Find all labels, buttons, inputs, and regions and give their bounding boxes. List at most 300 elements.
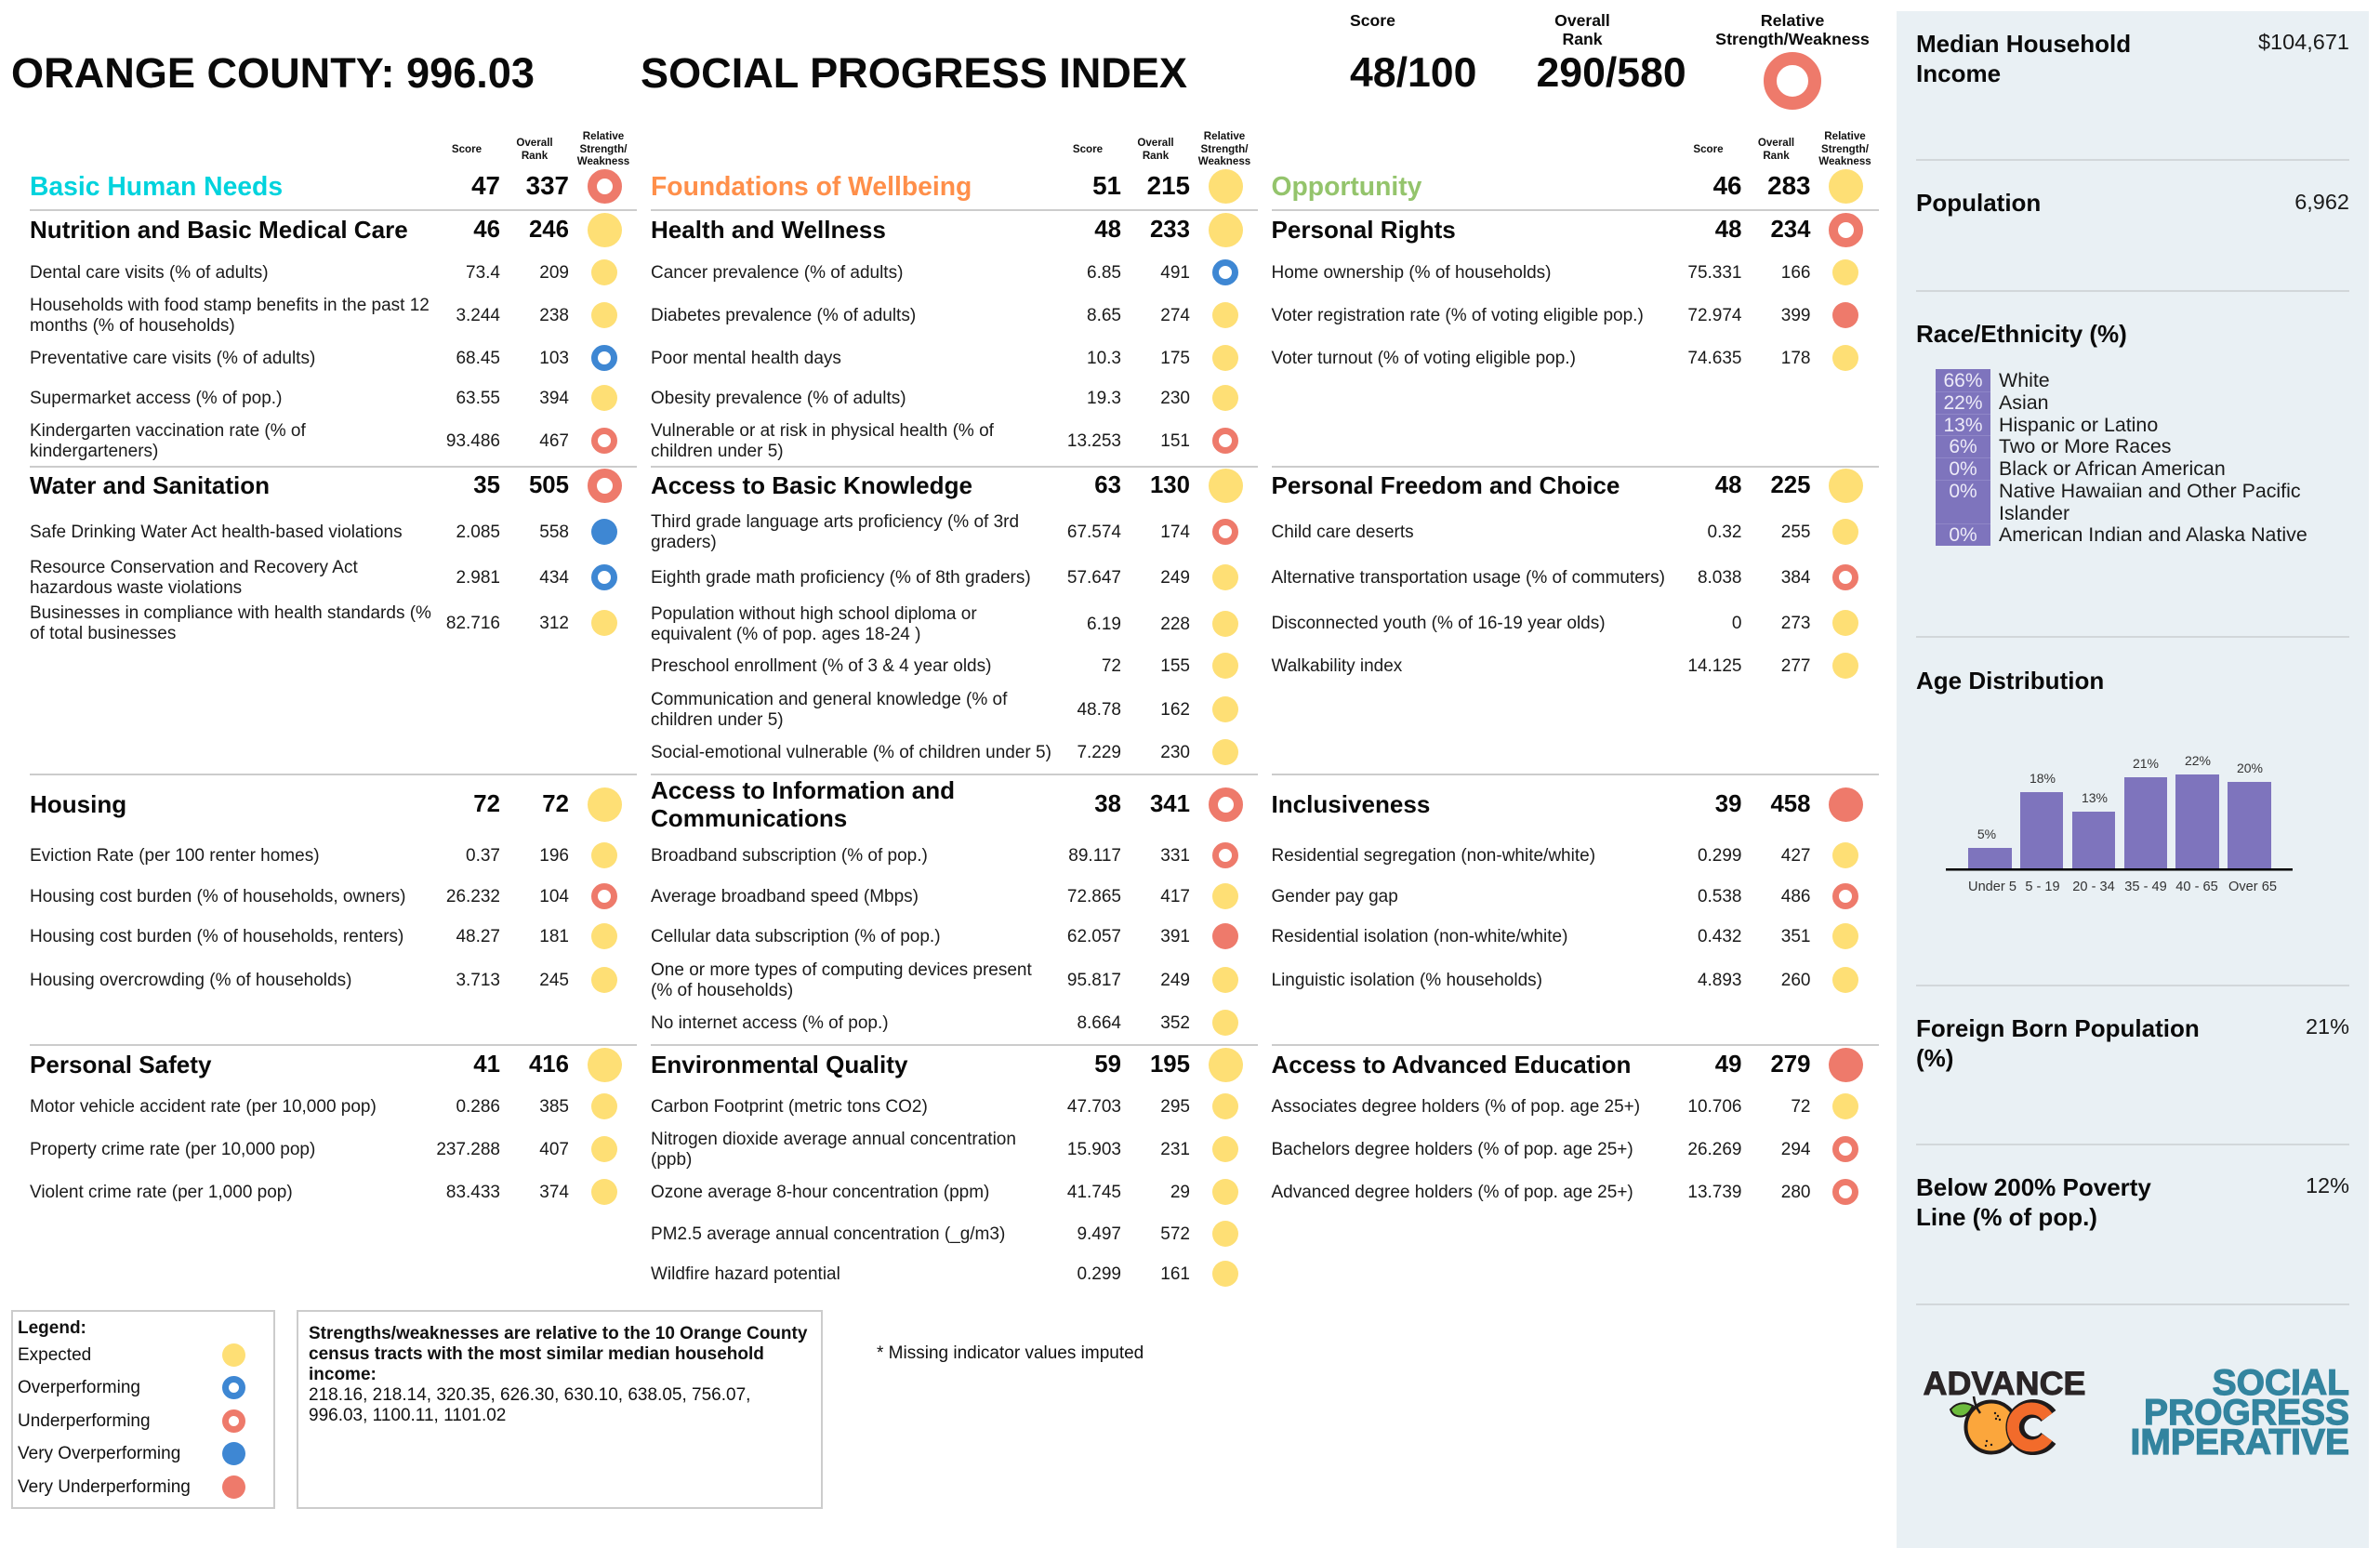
component: Environmental Quality: 59 <box>1094 1051 1121 1077</box>
row: Wildfire <box>651 1253 1258 1294</box>
row: Motor vehicle <box>30 1093 617 1119</box>
column headers: Rank <box>1143 150 1169 162</box>
note: comparison tracts: Strengths/weaknesses are relative to the 10 Orange County <box>309 1324 807 1343</box>
pillar heading: 337 <box>526 171 569 199</box>
row: Voter registration <box>1272 295 1878 336</box>
legend <box>11 1310 275 1509</box>
component: Personal Rights <box>1272 209 1878 250</box>
row: Social-emotional: 7.229 <box>1077 743 1121 762</box>
column headers: Relative <box>583 130 624 142</box>
heading: Age Distribution: Age Distribution <box>1916 667 2104 695</box>
column headers: Rank <box>522 150 548 162</box>
row: Alternative transportation: 384 <box>1781 567 1811 588</box>
row: Kindergarten vaccination: 467 <box>539 431 569 451</box>
panel: Foundations of Wellbeing <box>651 130 1258 1287</box>
row: Supermarket access <box>30 385 617 411</box>
bar chart: age distribution: 21% <box>2133 756 2159 771</box>
overall relative strength <box>1715 11 1870 110</box>
column headers: Overall <box>1137 137 1174 149</box>
component: Environmental Quality: 195 <box>1150 1051 1190 1077</box>
component: Access to Information <box>651 784 1258 825</box>
row: Housing cost renters <box>30 923 617 949</box>
row: Violent crime: 374 <box>539 1183 569 1202</box>
row: Social-emotional <box>651 732 1258 773</box>
row: Property crime <box>30 1136 617 1162</box>
component: Access to Information: 38 <box>1094 790 1121 816</box>
row: Home ownership: Home ownership (% of households) <box>1272 263 1551 283</box>
row: Obesity <box>651 385 1238 411</box>
row: Resource Conservation: 2.981 <box>456 567 500 588</box>
row: Third grade: 174 <box>1160 523 1190 541</box>
note: comparison tracts <box>297 1310 823 1509</box>
row: Kindergarten vaccination <box>30 421 617 461</box>
row: Broadband subscription: 89.117 <box>1068 846 1121 866</box>
note: missing values: * Missing indicator values imputed <box>877 1343 1144 1363</box>
bar chart: age distribution: Over 65 <box>2228 880 2277 894</box>
logo: Advance OC: ADVANCE <box>1923 1366 2086 1402</box>
component: Environmental Quality <box>651 1044 1258 1085</box>
component: Access to Information: Communications <box>651 803 847 831</box>
overall score: Score <box>1350 11 1395 30</box>
row: Resource Conservation: hazardous waste violations <box>30 578 242 597</box>
row: Linguistic isolation: 260 <box>1781 971 1811 990</box>
column headers: Weakness <box>1818 155 1871 167</box>
stat: Foreign Born Population: (%) <box>1916 1044 1953 1072</box>
pillar heading: 283 <box>1767 171 1811 199</box>
row: Poor mental health: 10.3 <box>1087 349 1121 368</box>
row: Bachelors: 294 <box>1781 1140 1811 1159</box>
bar chart: age distribution: Under 5 <box>1968 880 2016 894</box>
race table: White <box>1999 369 2050 391</box>
row: Ozone: 29 <box>1170 1183 1190 1202</box>
row: Carbon Footprint <box>651 1086 1258 1127</box>
race table: Asian <box>1999 391 2049 414</box>
row: Vulnerable physical health: 151 <box>1160 431 1190 451</box>
row: Ozone: Ozone average 8-hour concentration (ppm) <box>651 1183 989 1202</box>
row: Kindergarten vaccination: Kindergarten vaccination rate (% of <box>30 421 306 441</box>
row: Businesses in compliance <box>30 603 617 643</box>
row: No high school diploma <box>651 604 1238 644</box>
component: Access to Basic Knowledge: 63 <box>1094 472 1121 498</box>
component: Personal Freedom and Choice <box>1272 465 1878 506</box>
pillar heading: 46 <box>1713 171 1742 199</box>
component: Access to Information: Access to Information and <box>651 775 955 803</box>
row: Ozone <box>651 1171 1258 1212</box>
row: Property crime: 237.288 <box>436 1140 500 1159</box>
row: food stamp: 238 <box>539 306 569 325</box>
stat: Below 200% Poverty Line <box>1897 1172 2369 1232</box>
overall rank <box>1536 11 1686 96</box>
row: Average broadband speed <box>651 876 1258 917</box>
row: Home ownership: 75.331 <box>1687 263 1742 283</box>
row: Preventative care <box>30 345 617 371</box>
component: Personal Freedom and Choice: Personal Freedom and Choice <box>1272 471 1620 499</box>
row: Vulnerable physical health: Vulnerable or at risk in physical health (% of <box>651 421 994 441</box>
row: Eighth grade: Eighth grade math proficiency (% of 8th graders) <box>651 568 1031 588</box>
pillar heading <box>1272 165 1878 206</box>
row: Safe Drinking Water: 558 <box>539 523 569 541</box>
component: Personal Freedom and Choice: 225 <box>1770 472 1811 498</box>
column headers <box>452 130 629 167</box>
heading: Race/Ethnicity: Race/Ethnicity (%) <box>1916 320 2127 348</box>
stat: Foreign Born Population: Foreign Born Population <box>1916 1014 2200 1042</box>
stat: Below 200% Poverty Line: Line (% of pop.) <box>1916 1203 2097 1231</box>
row: Cellular data <box>651 916 1258 957</box>
row: Cancer: 6.85 <box>1087 263 1121 283</box>
row: Broadband subscription: 331 <box>1160 846 1190 866</box>
row: Supermarket access: 394 <box>539 389 569 408</box>
stat: Population: Population <box>1916 189 2041 217</box>
row: Average broadband speed: Average broadband speed (Mbps) <box>651 887 919 906</box>
pillar heading <box>651 169 1243 204</box>
row: Violent crime <box>30 1179 617 1205</box>
row: Safe Drinking Water: Safe Drinking Water Act health-based violations <box>30 523 403 541</box>
legend: Expected <box>18 1345 91 1365</box>
row: No internet: 352 <box>1160 1013 1190 1033</box>
row: Wildfire: 161 <box>1160 1264 1190 1284</box>
row: Safe Drinking Water <box>30 519 617 545</box>
row: Child care deserts: 0.32 <box>1708 523 1742 541</box>
row: Alternative transportation: 8.038 <box>1698 567 1742 588</box>
row: Nitrogen dioxide: Nitrogen dioxide average annual concentration <box>651 1130 1016 1149</box>
component: Environmental Quality: Environmental Quality <box>651 1051 907 1078</box>
row: Child care deserts: Child care deserts <box>1272 523 1414 541</box>
row: Poor mental health <box>651 345 1238 371</box>
row: Obesity: 19.3 <box>1087 389 1121 408</box>
note: comparison tracts: income: <box>309 1365 377 1384</box>
row: Computing devices: (% of households) <box>651 981 793 1000</box>
row: Diabetes: 274 <box>1160 306 1190 325</box>
logo: Social Progress Imperative: PROGRESS <box>2144 1393 2349 1433</box>
row: Communication: Communication and general knowledge (% of <box>651 690 1007 708</box>
row: Computing devices: 249 <box>1160 971 1190 990</box>
row: Safe Drinking Water: 2.085 <box>456 523 500 541</box>
bar chart: age distribution: 35 - 49 <box>2124 880 2167 894</box>
row: Dental care visits: Dental care visits (% of adults) <box>30 263 269 283</box>
row: Third grade: graders) <box>651 532 717 552</box>
row: food stamp: Households with food stamp benefits in the past 12 <box>30 296 430 315</box>
row: Residential segregation: Residential segregation (non-white/white) <box>1272 846 1595 866</box>
overall rank: 290/580 <box>1536 50 1686 96</box>
overall relative strength: Strength/Weakness <box>1715 30 1870 48</box>
column headers: Score <box>452 143 482 155</box>
logo: Advance OC <box>1915 1361 2092 1462</box>
row: Preventative care: 68.45 <box>456 349 500 368</box>
row: Carbon Footprint: Carbon Footprint (metric tons CO2) <box>651 1097 928 1117</box>
component: Water and Sanitation: 505 <box>529 472 569 498</box>
row: Housing cost renters: 48.27 <box>456 927 500 946</box>
column headers: Weakness <box>577 155 629 167</box>
row: Associates: Associates degree holders (% of pop. age 25+) <box>1272 1097 1640 1117</box>
row: Cellular data: 391 <box>1160 927 1190 946</box>
row: Cellular data: 62.057 <box>1067 927 1121 946</box>
row: Eviction <box>30 842 617 868</box>
component: Access to Advanced Education: 49 <box>1715 1051 1742 1077</box>
row: Housing cost renters: 181 <box>539 927 569 946</box>
component: Inclusiveness: 458 <box>1770 790 1811 816</box>
row: Walkability <box>1272 645 1878 686</box>
component: Access to Advanced Education <box>1272 1044 1878 1085</box>
row: Eviction: 0.37 <box>466 846 500 866</box>
row: Resource Conservation: 434 <box>539 567 569 588</box>
component: Water and Sanitation: 35 <box>473 472 500 498</box>
legend: Very Underperforming <box>18 1477 191 1497</box>
row: Computing devices: 95.817 <box>1067 971 1121 990</box>
column headers: Rank <box>1763 150 1790 162</box>
row: Communication: 162 <box>1160 699 1190 720</box>
row: No high school diploma: Population without high school diploma or <box>651 604 977 624</box>
component: Housing: 72 <box>542 790 569 816</box>
bar chart: age distribution: 20 - 34 <box>2072 880 2115 894</box>
stat: Foreign Born Population: 21% <box>2306 1014 2349 1039</box>
component: Personal Safety: 416 <box>529 1051 569 1077</box>
component: Housing: 72 <box>473 790 500 816</box>
row: Cancer: Cancer prevalence (% of adults) <box>651 263 903 283</box>
row: Housing overcrowding: 3.713 <box>456 971 500 990</box>
column headers: Relative <box>1824 130 1866 142</box>
row: Dental care visits: 209 <box>539 263 569 283</box>
row: Supermarket access: Supermarket access (% of pop.) <box>30 389 282 408</box>
row: Advanced degree: Advanced degree holders (% of pop. age 25+) <box>1272 1183 1633 1202</box>
row: Wildfire: 0.299 <box>1077 1264 1121 1284</box>
row: Voter turnout: 178 <box>1781 349 1811 368</box>
component: Water and Sanitation <box>30 469 622 503</box>
row: Gender pay gap <box>1272 876 1878 917</box>
row: Residential segregation: 427 <box>1781 846 1811 866</box>
row: Resource Conservation: Resource Conservation and Recovery Act <box>30 558 358 576</box>
row: Nitrogen dioxide <box>651 1129 1258 1170</box>
bar chart: age distribution: 22% <box>2185 753 2211 768</box>
row: Advanced degree <box>1272 1171 1878 1212</box>
row: food stamp: months (% of households) <box>30 316 235 336</box>
row: No internet: 8.664 <box>1077 1013 1121 1033</box>
row: Communication <box>651 690 1238 729</box>
row: No high school diploma: 6.19 <box>1087 615 1121 634</box>
component: Personal Freedom and Choice: 48 <box>1715 472 1742 498</box>
row: Dental care visits: 73.4 <box>466 263 500 283</box>
row: Housing cost renters: Housing cost burden (% of households, renters) <box>30 927 403 946</box>
column headers: Overall <box>1758 137 1794 149</box>
row: Violent crime: 83.433 <box>446 1183 500 1202</box>
component: Health and Wellness: Health and Wellness <box>651 216 886 244</box>
row: Housing cost owners: 104 <box>539 887 569 906</box>
logo: Social Progress Imperative: SOCIAL <box>2213 1363 2349 1403</box>
row: Diabetes <box>651 302 1238 328</box>
row: Nitrogen dioxide: 231 <box>1160 1140 1190 1159</box>
row: Advanced degree: 13.739 <box>1687 1183 1742 1202</box>
row: Wildfire: Wildfire hazard potential <box>651 1264 840 1284</box>
row: Kindergarten vaccination: kindergarteners) <box>30 442 158 461</box>
component: Health and Wellness: 233 <box>1150 216 1190 242</box>
row: Bachelors: 26.269 <box>1687 1140 1742 1159</box>
row: Preschool: Preschool enrollment (% of 3 & 4 year olds) <box>651 656 991 676</box>
row: Computing devices: One or more types of computing devices present <box>651 960 1032 980</box>
row: Housing cost owners: Housing cost burden (% of households, owners) <box>30 887 406 906</box>
row: Poor mental health: 175 <box>1160 349 1190 368</box>
row: Motor vehicle: 0.286 <box>456 1097 500 1117</box>
row: Disconnected youth: 273 <box>1781 614 1811 633</box>
row: Diabetes: Diabetes prevalence (% of adults) <box>651 306 916 325</box>
component: Access to Basic Knowledge: 130 <box>1150 472 1190 498</box>
row: Housing overcrowding <box>30 967 617 993</box>
component: Personal Rights: 234 <box>1770 216 1811 242</box>
component: Health and Wellness: 48 <box>1094 216 1121 242</box>
note: comparison tracts: 996.03, 1100.11, 1101.02 <box>309 1406 506 1425</box>
row: Nitrogen dioxide: (ppb) <box>651 1150 692 1170</box>
overall relative strength: Relative <box>1761 11 1824 30</box>
title: tract name: ORANGE COUNTY: 996.03 <box>11 49 535 97</box>
row: Gender pay gap: Gender pay gap <box>1272 887 1398 906</box>
stat: Median Household Income <box>1897 29 2369 88</box>
row: Businesses in compliance: 82.716 <box>446 614 500 633</box>
row: Preventative care: Preventative care visits (% of adults) <box>30 349 315 368</box>
row: Third grade: 67.574 <box>1067 523 1121 541</box>
row: Property crime: Property crime rate (per 10,000 pop) <box>30 1140 315 1159</box>
row: Cellular data: Cellular data subscription (% of pop.) <box>651 927 941 946</box>
row: Vulnerable physical health: children under 5) <box>651 442 784 461</box>
row: Violent crime: Violent crime rate (per 1,000 pop) <box>30 1183 293 1202</box>
stat: Median Household Income: $104,671 <box>2258 30 2349 54</box>
row: Third grade <box>651 511 1238 552</box>
component: Access to Information: 341 <box>1150 790 1190 816</box>
component: Personal Rights: Personal Rights <box>1272 216 1456 244</box>
overall score <box>1350 11 1476 96</box>
row: Gender pay gap: 486 <box>1781 887 1811 906</box>
panel: Basic Human Needs <box>30 130 637 1205</box>
row: Residential isolation <box>1272 916 1878 957</box>
logo: Social Progress Imperative: IMPERATIVE <box>2131 1422 2349 1462</box>
row: Motor vehicle: 385 <box>539 1097 569 1117</box>
overall score: 48/100 <box>1350 50 1476 96</box>
component: Nutrition <box>30 213 622 247</box>
row: Linguistic isolation: Linguistic isolation (% households) <box>1272 971 1542 990</box>
column headers: Score <box>1073 143 1103 155</box>
component: Access to Basic Knowledge <box>651 469 1243 503</box>
column headers <box>1073 130 1250 167</box>
row: Nitrogen dioxide: 15.903 <box>1067 1140 1121 1159</box>
race table: Black or African American <box>1999 457 2226 480</box>
row: Associates: 72 <box>1791 1097 1811 1117</box>
pillar heading: 51 <box>1092 171 1121 199</box>
pillar heading <box>30 169 622 204</box>
row: Walkability: 277 <box>1781 656 1811 676</box>
column headers <box>1272 130 1878 169</box>
row: Eighth grade: 249 <box>1160 568 1190 588</box>
row: Social-emotional: Social-emotional vulnerable (% of children under 5) <box>651 743 1051 762</box>
pillar heading: Basic Human Needs <box>30 171 283 201</box>
row: No internet: No internet access (% of pop.) <box>651 1013 889 1033</box>
row: Residential isolation: Residential isolation (non-white/white) <box>1272 927 1567 946</box>
row: Communication: children under 5) <box>651 710 784 729</box>
row: Diabetes: 8.65 <box>1087 306 1121 325</box>
row: Dental care visits <box>30 259 617 285</box>
component: Access to Advanced Education: Access to Advanced Education <box>1272 1051 1631 1078</box>
row: Linguistic isolation <box>1272 959 1878 1000</box>
row: Cancer: 491 <box>1160 263 1190 283</box>
note: comparison tracts: census tracts with the most similar median household <box>309 1344 764 1364</box>
row: Child care deserts: 255 <box>1781 523 1811 541</box>
race table: American Indian and Alaska Native <box>1999 523 2307 546</box>
row: Eighth grade: 57.647 <box>1067 568 1121 588</box>
component: Housing <box>30 787 622 822</box>
stat: Median Household Income: Income <box>1916 60 2001 87</box>
row: Motor vehicle: Motor vehicle accident rate (per 10,000 pop) <box>30 1097 377 1117</box>
row: PM2.5: PM2.5 average annual concentration (_g/m3) <box>651 1224 1005 1244</box>
bar chart: age distribution <box>1897 736 2369 913</box>
component: Personal Safety <box>30 1048 622 1082</box>
legend: Legend: <box>18 1318 86 1338</box>
row: Voter turnout: Voter turnout (% of voting eligible pop.) <box>1272 349 1576 368</box>
row: PM2.5: 572 <box>1160 1224 1190 1244</box>
bar chart: age distribution: 5 - 19 <box>2025 880 2060 894</box>
row: No internet <box>651 1002 1258 1043</box>
row: Average broadband speed: 72.865 <box>1067 887 1121 906</box>
row: Social-emotional: 230 <box>1160 743 1190 762</box>
component: Nutrition: Nutrition and Basic Medical Care <box>30 216 408 244</box>
row: Disconnected youth <box>1272 602 1878 643</box>
row: Resource Conservation <box>30 558 617 597</box>
column headers: Strength/ <box>1201 143 1248 155</box>
row: Businesses in compliance: of total businesses <box>30 624 176 643</box>
row: Voter registration: Voter registration rate (% of voting eligible pop.) <box>1272 306 1644 325</box>
bar chart: age distribution: 18% <box>2030 771 2056 786</box>
row: PM2.5: 9.497 <box>1077 1224 1121 1244</box>
row: Third grade: Third grade language arts proficiency (% of 3rd <box>651 511 1019 532</box>
row: Housing cost owners <box>30 883 617 909</box>
legend: Very Overperforming <box>18 1444 180 1463</box>
stat: Population: 6,962 <box>2294 190 2349 214</box>
row: Cancer <box>651 259 1238 285</box>
row: Broadband subscription <box>651 835 1258 876</box>
race table: Native Hawaiian and Other Pacific <box>1999 480 2301 502</box>
row: Property crime: 407 <box>539 1140 569 1159</box>
row: Associates <box>1272 1086 1878 1127</box>
row: Businesses in compliance: 312 <box>539 614 569 633</box>
bar chart: age distribution: 13% <box>2082 790 2108 805</box>
row: Eviction: Eviction Rate (per 100 renter homes) <box>30 846 320 866</box>
row: Home ownership: 166 <box>1781 263 1811 283</box>
stat: Below 200% Poverty Line: 12% <box>2306 1173 2349 1197</box>
overall rank: Overall <box>1554 11 1610 30</box>
pillar heading: 215 <box>1147 171 1190 199</box>
column headers: Relative <box>1204 130 1245 142</box>
component: Housing: Housing <box>30 790 126 818</box>
row: Disconnected youth: Disconnected youth (% of 16-19 year olds) <box>1272 614 1606 633</box>
row: Voter registration: 72.974 <box>1687 306 1742 325</box>
component: Health and Wellness <box>651 213 1243 247</box>
stat: Below 200% Poverty Line: Below 200% Poverty <box>1916 1173 2151 1201</box>
row: Housing overcrowding: 245 <box>539 971 569 990</box>
column headers: Strength/ <box>580 143 627 155</box>
row: Preschool: 155 <box>1160 656 1190 676</box>
bar chart: age distribution: 40 - 65 <box>2175 880 2218 894</box>
pillar heading: Foundations of Wellbeing <box>651 171 972 201</box>
column headers: Overall <box>516 137 553 149</box>
row: Disconnected youth: 0 <box>1732 614 1742 633</box>
row: Housing overcrowding: Housing overcrowding (% of households) <box>30 971 351 990</box>
row: No high school diploma: 228 <box>1160 615 1190 634</box>
row: Preventative care: 103 <box>539 349 569 368</box>
row: Housing cost owners: 26.232 <box>446 887 500 906</box>
row: Broadband subscription: Broadband subscription (% of pop.) <box>651 846 928 866</box>
component: Personal Rights: 48 <box>1715 216 1742 242</box>
row: Vulnerable physical health: 13.253 <box>1067 431 1121 451</box>
component: Nutrition: 246 <box>529 216 569 242</box>
component: Access to Basic Knowledge: Access to Basic Knowledge <box>651 471 972 499</box>
row: food stamp: 3.244 <box>456 306 500 325</box>
row: Eviction: 196 <box>539 846 569 866</box>
row: Poor mental health: Poor mental health days <box>651 349 841 368</box>
